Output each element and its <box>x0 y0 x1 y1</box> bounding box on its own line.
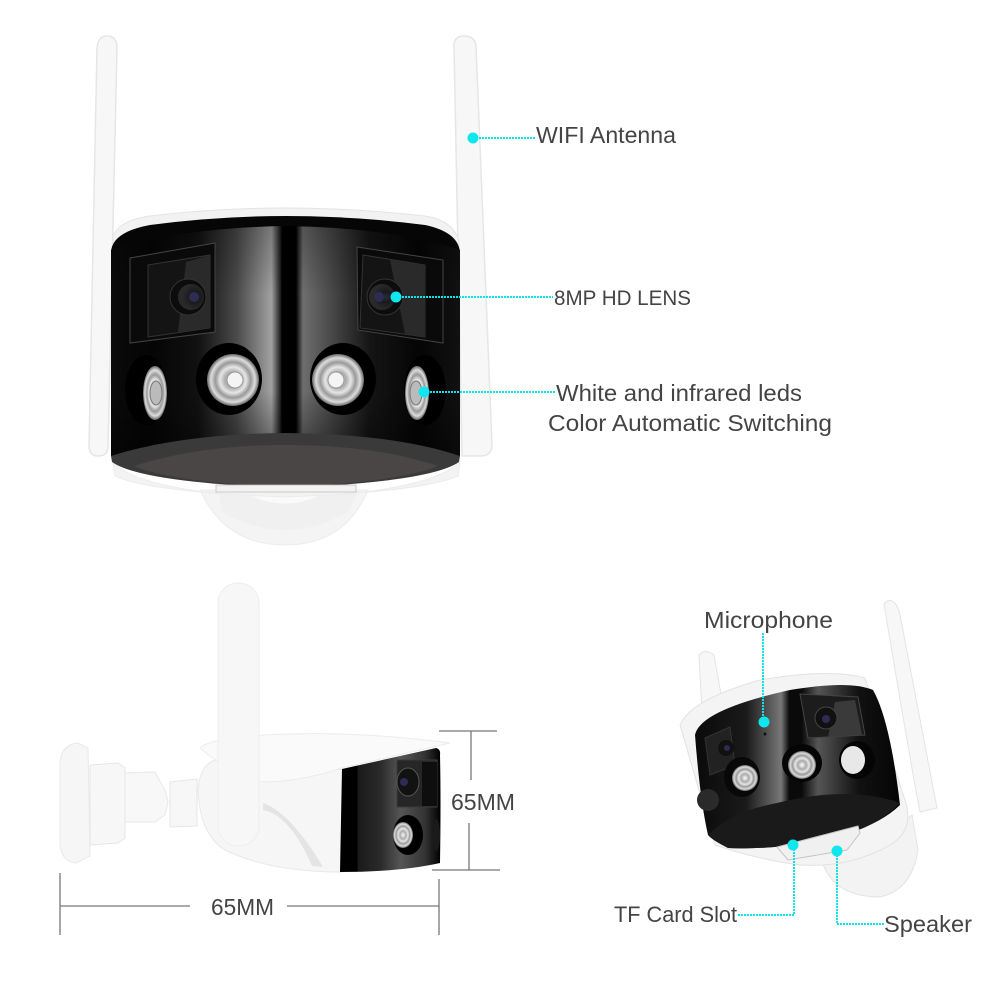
callout: white and infrared leds <box>418 380 832 436</box>
callout: speaker: Speaker <box>884 911 972 937</box>
underside panel <box>111 433 460 488</box>
icon: left antenna <box>699 652 722 712</box>
callout: microphone: Microphone <box>704 607 833 633</box>
icon: left WiFi antenna <box>89 36 117 456</box>
callout: TF card slot: TF Card Slot <box>614 902 737 927</box>
side lens <box>397 760 437 807</box>
callout: WIFI Antenna: WIFI Antenna <box>536 122 676 148</box>
glossy front band <box>111 226 460 456</box>
white lower housing <box>113 462 460 497</box>
callout: 8MP HD LENS: 8MP HD LENS <box>554 287 691 310</box>
icon: mount <box>820 815 918 897</box>
lens module right <box>800 694 865 738</box>
body crease <box>263 803 323 867</box>
icon: mount collar <box>90 763 125 845</box>
icon: wall plate <box>60 743 90 863</box>
icon: mount arm <box>125 772 168 822</box>
side LED <box>393 815 440 855</box>
callout: microphone <box>704 607 833 736</box>
icon: right WiFi antenna <box>454 36 492 456</box>
lens module left <box>705 727 735 775</box>
LED left center <box>196 343 262 415</box>
camera white body <box>198 760 345 872</box>
callout: 8MP HD LENS <box>390 287 691 310</box>
callout: speaker <box>832 846 972 937</box>
callout: WIFI Antenna <box>468 122 676 148</box>
white hood <box>200 734 450 782</box>
LEDs and sensor <box>697 741 875 811</box>
dimension: height 65MM: 65MM <box>451 789 515 815</box>
icon: wall mount dome <box>200 490 368 545</box>
panel: underside camera view <box>680 600 937 897</box>
icon: small collar <box>170 779 197 827</box>
band shading <box>111 226 460 456</box>
white housing <box>680 673 908 865</box>
black front <box>340 748 440 872</box>
LED right center <box>310 343 376 415</box>
panel: side camera view <box>60 583 515 935</box>
icon: antenna <box>218 583 259 846</box>
callout: white and infrared leds: White and infrared leds <box>556 380 802 406</box>
icon: back antenna <box>884 600 937 812</box>
white top cap <box>113 208 459 250</box>
left lens module <box>130 243 215 343</box>
underside dark disk <box>708 794 900 848</box>
camera black body <box>111 216 460 456</box>
dimension: width 65MM <box>60 873 439 935</box>
port strip <box>777 826 860 860</box>
right lens module <box>357 247 443 343</box>
dimension: width 65MM: 65MM <box>211 894 274 920</box>
black barrel <box>695 685 900 848</box>
callout: TF card slot <box>614 840 798 927</box>
callout: white and infrared leds: Color Automatic Switching <box>548 410 832 436</box>
mount plate <box>216 485 356 492</box>
LED right outer <box>404 355 446 425</box>
panel: front camera view <box>89 36 492 545</box>
dimension: height 65MM <box>432 731 515 870</box>
LED left outer <box>125 355 167 425</box>
